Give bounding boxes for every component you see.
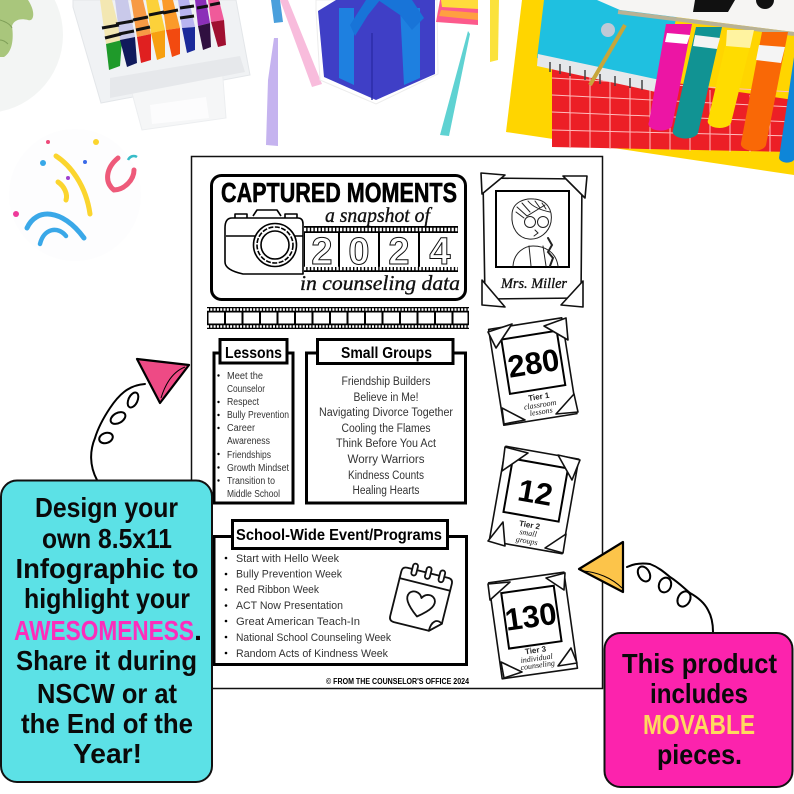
- callout text: AWESOMENESS: [14, 615, 194, 646]
- document page: [192, 156, 602, 688]
- confetti sticker: [9, 129, 141, 261]
- tier 3 label: counseling: [520, 658, 555, 672]
- callout text: highlight your: [24, 583, 190, 614]
- tier 1 label: Tier 1: [528, 391, 551, 403]
- callout text: the End of the: [21, 708, 193, 739]
- events list: Random Acts of Kindness Week: [236, 648, 388, 660]
- value 12: 12: [515, 472, 555, 513]
- callout text: own 8.5x11: [42, 523, 172, 554]
- callout text: Design your: [35, 492, 178, 523]
- callout text: Infographic to: [16, 553, 198, 584]
- lessons list: Friendships: [227, 450, 271, 461]
- lessons list: Transition to: [227, 476, 275, 487]
- callout text: [14, 492, 202, 769]
- stat card: tier 2: [488, 446, 580, 554]
- callout text: Share it during: [16, 645, 197, 676]
- folders and notebook: [506, 0, 794, 175]
- header banner: [212, 176, 466, 300]
- small groups list: Believe in Me!: [354, 392, 418, 404]
- lessons list: Growth Mindset: [227, 463, 289, 474]
- callout text: Year!: [73, 738, 142, 769]
- tier 2 label: groups: [515, 535, 538, 547]
- callout: magenta: [604, 633, 792, 787]
- lessons list: Middle School: [227, 489, 280, 500]
- callout text: [622, 648, 777, 770]
- events list: [225, 553, 391, 660]
- lessons list: Awareness: [227, 436, 270, 447]
- decorative film strip: [207, 307, 469, 329]
- tier 3 label: [518, 644, 555, 672]
- film strip with year: 2: [388, 231, 410, 273]
- pencil pouch: [597, 0, 794, 34]
- tier 2 label: [515, 519, 541, 547]
- small groups heading: Small Groups: [341, 345, 432, 362]
- events heading: [232, 520, 448, 548]
- panel: small groups: [306, 340, 466, 503]
- small groups list: Navigating Divorce Together: [319, 407, 453, 419]
- panel: school-wide events: [214, 520, 469, 686]
- value 130: 130: [503, 596, 559, 638]
- subtitle: a snapshot of: [325, 203, 433, 227]
- birthday candles: [266, 0, 499, 146]
- film strip with year: [304, 226, 458, 273]
- photo: desk items: [0, 0, 794, 261]
- name label: Mrs. Miller: [500, 276, 567, 292]
- lessons list: Meet the: [227, 371, 263, 382]
- film strip with year: 2: [311, 231, 333, 273]
- lessons list: [217, 371, 289, 500]
- small groups list: Healing Hearts: [352, 485, 420, 497]
- callout text: pieces.: [657, 739, 742, 770]
- callout text: MOVABLE: [643, 709, 755, 740]
- callout text: includes: [650, 678, 748, 709]
- arrow: pink curl: [91, 359, 189, 480]
- title: CAPTURED MOMENTS: [221, 177, 457, 208]
- callout text: .: [194, 615, 202, 646]
- tier 1 label: lessons: [529, 405, 553, 418]
- copyright: © FROM THE COUNSELOR'S OFFICE 2024: [326, 677, 469, 686]
- callout text: This product: [622, 648, 777, 679]
- lessons heading: [220, 340, 287, 363]
- stat card: tier 1: [488, 318, 578, 425]
- film strip with year: 4: [429, 231, 451, 273]
- small groups list: Kindness Counts: [348, 470, 424, 482]
- lessons list: Bully Prevention: [227, 410, 289, 421]
- tier 1 label: [522, 390, 558, 419]
- small groups list: [319, 376, 453, 497]
- events list: Great American Teach-In: [236, 616, 360, 628]
- markers: [648, 24, 794, 163]
- callout: cyan: [1, 480, 212, 782]
- crayon box: [73, 0, 250, 130]
- lessons list: Respect: [227, 397, 259, 408]
- lessons list: Counselor: [227, 384, 266, 395]
- counselor portrait: [512, 199, 558, 266]
- panel: lessons: [214, 340, 293, 503]
- icon: heart calendar: [389, 561, 454, 633]
- value 280: 280: [505, 342, 562, 385]
- small groups list: Friendship Builders: [342, 376, 431, 388]
- tier 3 label: Tier 3: [524, 644, 547, 656]
- events list: Bully Prevention Week: [236, 568, 342, 580]
- portrait polaroid: [481, 173, 587, 307]
- plate and plant: [0, 0, 63, 113]
- callout text: NSCW or at: [37, 678, 177, 709]
- film strip with year: 0: [348, 231, 370, 273]
- events heading: School-Wide Event/Programs: [236, 527, 442, 544]
- events list: Start with Hello Week: [236, 553, 339, 565]
- tier 2 label: Tier 2: [518, 519, 541, 531]
- lessons heading: Lessons: [225, 345, 282, 362]
- events list: National School Counseling Week: [236, 632, 391, 644]
- gift box: [316, 0, 438, 104]
- crayons: [100, 0, 226, 70]
- small groups list: Cooling the Flames: [342, 423, 431, 435]
- tagline: in counseling data: [300, 271, 460, 295]
- tier 3 label: individual: [520, 651, 554, 665]
- party hat piece: [436, 0, 478, 25]
- small groups list: Think Before You Act: [336, 438, 437, 450]
- arrow: yellow curl: [579, 542, 713, 632]
- tier 1 label: classroom: [523, 398, 557, 412]
- stat card: tier 3: [488, 572, 577, 679]
- events list: Red Ribbon Week: [236, 584, 319, 596]
- small groups heading: [318, 340, 453, 364]
- events list: ACT Now Presentation: [236, 600, 343, 612]
- lessons list: Career: [227, 423, 256, 434]
- camera icon: [225, 210, 303, 274]
- small groups list: Worry Warriors: [348, 454, 425, 466]
- tier 2 label: small: [519, 527, 538, 539]
